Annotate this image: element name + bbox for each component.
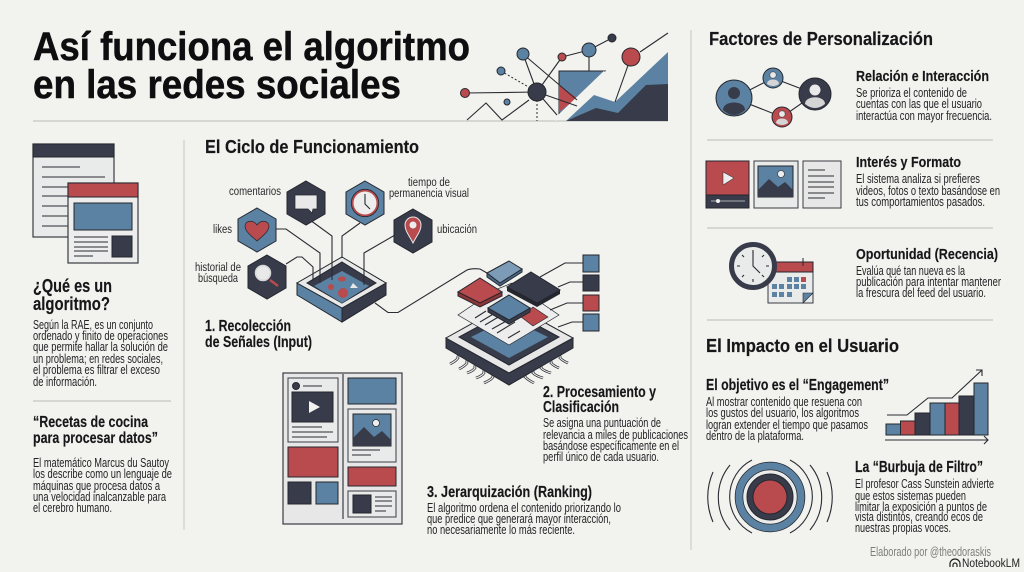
- text: step 2: relevancia a miles de publicaciones: [543, 428, 688, 442]
- text: definición: [33, 318, 168, 389]
- text: oportunidad: [856, 264, 1001, 300]
- heading: recetas de cocina: para procesar datos”: [33, 430, 158, 447]
- signal labels: historial de: [195, 260, 241, 274]
- panel: qué es un algoritmo: [33, 144, 168, 389]
- text: definición: que permite hallar la solución de: [33, 340, 168, 354]
- heading: relación e interacción: Relación e Interacción: [856, 69, 989, 85]
- text: interés: [856, 172, 1000, 209]
- text: step 3: [427, 501, 621, 537]
- text: step 2: basándose específicamente en el: [543, 439, 679, 453]
- text: step 2: perfil único de cada usuario.: [543, 450, 659, 464]
- connector: tray to chip: [375, 269, 487, 312]
- text: du Sautoy: una velocidad inalcanzable para: [33, 490, 166, 504]
- panel: relación e interacción: [716, 68, 992, 127]
- icon: location hexagon: [394, 209, 432, 253]
- text: step 3: que predice que generará mayor interacción,: [427, 512, 611, 526]
- signal labels: [195, 175, 477, 285]
- icon: comment hexagon: [287, 181, 325, 225]
- signal labels: búsqueda: [198, 271, 238, 285]
- signal labels: comentarios: [229, 184, 281, 198]
- text: definición: el problema es filtrar el exceso: [33, 363, 160, 377]
- icon: processor chip: [446, 261, 573, 385]
- heading: el ciclo de funcionamiento: El Ciclo de Funcionamiento: [205, 136, 419, 157]
- heading: factores de personalización: Factores de Personalización: [709, 28, 933, 49]
- icon: network and rising chart header graphic: [460, 33, 668, 121]
- icon: filter bubble: [708, 460, 832, 533]
- text: engagement: [706, 395, 868, 443]
- title: [33, 25, 470, 107]
- heading: recetas de cocina: “Recetas de cocina: [33, 414, 148, 431]
- heading: qué es un algoritmo: algoritmo?: [33, 294, 110, 314]
- heading: step 2: 2. Procesamiento y: [543, 384, 656, 401]
- text: step 2: [543, 416, 688, 464]
- heading: qué es un algoritmo: ¿Qué es un: [33, 276, 112, 296]
- title: en las redes sociales: [33, 63, 401, 107]
- text: oportunidad: Evalúa qué tan nueva es la: [856, 264, 965, 278]
- panel: step 1 signal collection: [195, 175, 477, 351]
- text: definición: Según la RAE, es un conjunto: [33, 318, 153, 332]
- text: engagement: dentro de la plataforma.: [706, 429, 804, 443]
- heading: el impacto en el usuario: El Impacto en el Usuario: [706, 335, 899, 356]
- output squares with connectors: [540, 255, 599, 331]
- heading: step 2: [543, 384, 656, 416]
- heading: burbuja: La “Burbuja de Filtro”: [855, 459, 983, 476]
- icon: video, photo, text formats: [706, 161, 841, 208]
- text: burbuja: [855, 477, 994, 535]
- panel: burbuja de filtro: [708, 459, 994, 535]
- signal labels: permanencia visual: [389, 186, 469, 200]
- text: burbuja: que estos sistemas pueden: [855, 489, 966, 503]
- heading: engagement: El objetivo es el “Engagement”: [706, 377, 889, 394]
- heading: recetas de cocina: [33, 414, 158, 447]
- panel: step 2 processing: [446, 255, 688, 464]
- icon: clock and calendar: [732, 244, 813, 303]
- heading: qué es un algoritmo: [33, 276, 112, 314]
- panel: interés y formato: [706, 155, 1000, 209]
- heading: step 1: de Señales (Input): [205, 334, 312, 351]
- heading: step 1: 1. Recolección: [205, 318, 291, 335]
- bar chart: growth: [885, 370, 988, 444]
- text: du Sautoy: máquinas que procesa datos a: [33, 479, 160, 493]
- text: relación: cuentas con las que el usuario: [856, 97, 982, 111]
- text: interés: tus comportamientos pasados.: [856, 195, 985, 209]
- text: definición: de información.: [33, 375, 97, 389]
- text: du Sautoy: [33, 456, 172, 515]
- heading: oportunidad: Oportunidad (Recencia): [856, 247, 998, 263]
- signal labels: likes: [213, 222, 232, 236]
- text: step 3: no necesariamente lo más reciente.: [427, 523, 575, 537]
- text: relación: Se prioriza el contenido de: [856, 86, 967, 100]
- panel: step 3 ranking: [283, 373, 621, 537]
- text: engagement: logran extender el tiempo que pasamos: [706, 418, 868, 432]
- text: step 3: El algoritmo ordena el contenido priorizando lo: [427, 501, 621, 515]
- icon: search hexagon: [248, 255, 286, 299]
- text: du Sautoy: El matemático Marcus du Sautoy: [33, 456, 170, 470]
- heading: step 1: [205, 318, 312, 351]
- icon: heart hexagon: [238, 208, 276, 252]
- icon: documents: [33, 144, 138, 263]
- panel: oportunidad recencia: [732, 244, 1001, 303]
- text: definición: un problema; en redes sociales,: [33, 352, 163, 366]
- icon: people network: [716, 68, 831, 127]
- heading: interés y formato: Interés y Formato: [856, 155, 961, 171]
- text: step 2: Se asigna una puntuación de: [543, 416, 661, 430]
- panel: engagement: [706, 370, 988, 444]
- heading: step 2: Clasificación: [543, 399, 619, 416]
- title: Así funciona el algoritmo: [33, 25, 470, 69]
- text: du Sautoy: el cerebro humano.: [33, 501, 112, 515]
- signal labels: tiempo de: [408, 175, 450, 189]
- text: engagement: los gustos del usuario, los algoritmos: [706, 406, 859, 420]
- icon: tray: [297, 257, 386, 322]
- connectors: signals into tray: [276, 220, 395, 285]
- signal labels: ubicación: [437, 222, 477, 236]
- text: burbuja: nuestras propias voces.: [855, 521, 951, 535]
- icon: clock hexagon: [346, 181, 384, 225]
- heading: step 3: 3. Jerarquización (Ranking): [427, 484, 592, 501]
- text: relación: [856, 86, 992, 123]
- text: engagement: Al mostrar contenido que resuena con: [706, 395, 862, 409]
- text: definición: ordenado y finito de operaciones: [33, 329, 168, 343]
- text: interés: El sistema analiza si prefieres: [856, 172, 980, 186]
- icon: ranked feed mockup: [283, 373, 402, 524]
- text: du Sautoy: los describe como un lenguaje de: [33, 467, 172, 481]
- panel: recetas de cocina: [33, 414, 172, 515]
